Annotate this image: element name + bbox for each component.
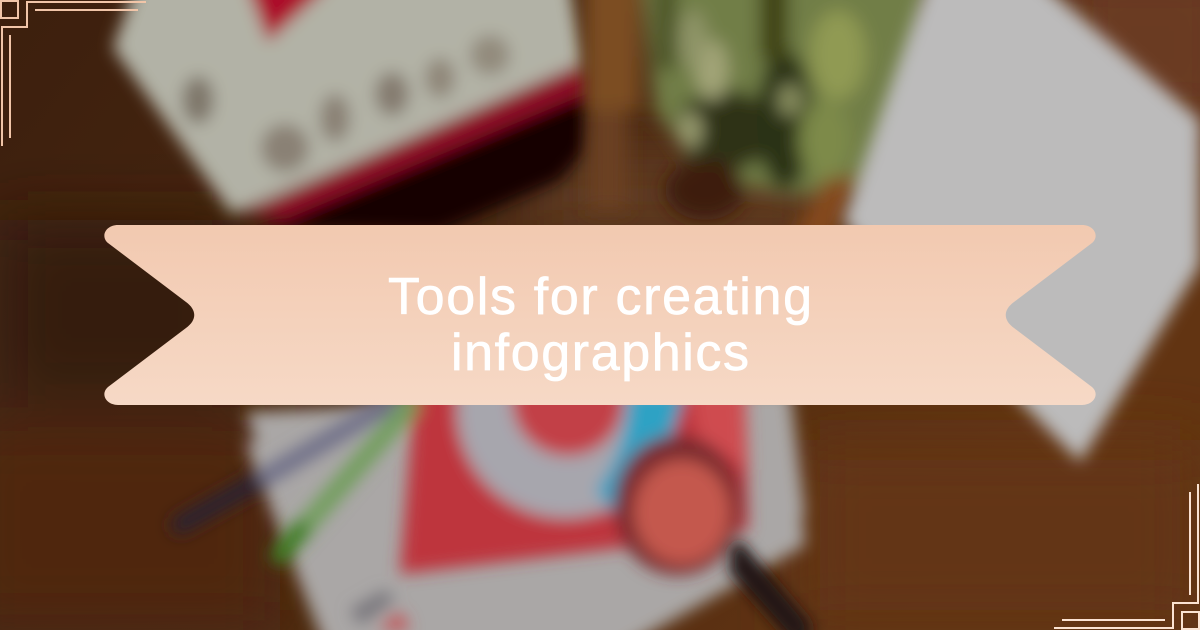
ribbon shape <box>104 225 1096 405</box>
title: infographics <box>451 324 749 382</box>
ribbon banner with title <box>104 225 1096 405</box>
white notepad <box>843 0 1200 462</box>
magnifier handle <box>726 540 816 630</box>
paper sheet <box>245 390 805 630</box>
white box <box>113 0 590 232</box>
corner ornament: top left <box>1 1 146 146</box>
title: Tools for creating <box>388 268 812 326</box>
potted plant <box>585 0 930 240</box>
paper chart with pens and magnifier <box>180 302 748 630</box>
corner ornament: bottom right <box>1054 484 1199 629</box>
